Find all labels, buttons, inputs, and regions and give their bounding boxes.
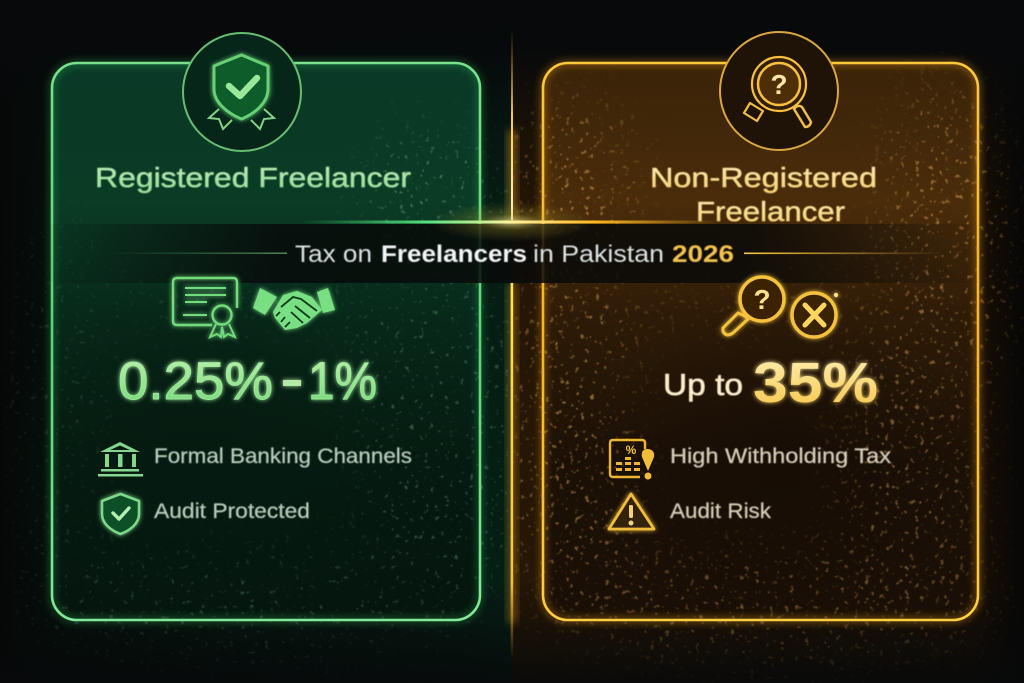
card border <box>52 63 480 620</box>
heading: registered freelancer: Registered Freelancer <box>95 162 411 193</box>
icon: tax calculator <box>610 440 654 480</box>
title text: 2026 <box>672 241 734 268</box>
big figure: 0.25% - 1%: 0.25% <box>118 352 273 411</box>
panel: registered freelancer <box>0 63 480 660</box>
icon: handshake <box>253 288 335 330</box>
card glow border <box>52 63 480 620</box>
title text: Tax on <box>295 241 372 268</box>
big figure: up to 35%: 35% <box>753 351 878 415</box>
title text: in Pakistan <box>533 241 664 268</box>
icon: magnifier with cross <box>723 277 838 337</box>
list row: formal banking channels <box>98 442 412 476</box>
label: Audit Protected <box>154 500 310 523</box>
label: Formal Banking Channels <box>154 445 412 468</box>
central vertical glowing divider <box>507 30 517 658</box>
icon: magnifier question badge: ? <box>770 69 788 100</box>
label: High Withholding Tax <box>670 445 892 468</box>
panel: non-registered freelancer <box>543 63 978 640</box>
label: Audit Risk <box>670 500 772 523</box>
banner background <box>40 224 985 283</box>
icon: shield badge <box>183 33 301 151</box>
card inner shade <box>0 280 400 660</box>
icon: warning triangle <box>609 494 654 529</box>
list row: audit protected <box>102 494 310 534</box>
speckle texture: amber <box>512 0 1024 683</box>
heading: non-registered freelancer: Freelancer <box>696 196 845 227</box>
heading: non-registered freelancer <box>650 162 877 227</box>
list row: audit risk <box>609 494 772 529</box>
icon: tax calculator: % <box>626 443 637 457</box>
banner top glowing line <box>300 220 720 224</box>
icon: bank <box>98 442 143 476</box>
title text: Freelancers <box>381 241 527 268</box>
title banner <box>40 202 985 283</box>
icon: certificate <box>173 278 237 337</box>
card border <box>543 63 978 620</box>
banner flare <box>432 202 592 242</box>
speckle texture: green <box>6 115 510 664</box>
icon: magnifier with cross: ? <box>753 284 771 315</box>
list row: high withholding tax <box>610 440 892 480</box>
background: green half <box>0 0 512 683</box>
big figure: 0.25% - 1%: 1% <box>308 352 377 411</box>
banner left rule <box>110 252 287 254</box>
icon: magnifier question badge <box>720 32 838 150</box>
big figure: 0.25% - 1% <box>118 352 377 411</box>
banner right rule <box>744 252 944 254</box>
big figure: up to 35%: Up to <box>663 367 743 402</box>
card fill <box>543 63 978 620</box>
big figure: up to 35% <box>663 351 878 415</box>
title text <box>295 241 734 268</box>
icon: small shield <box>102 494 139 534</box>
card inner shade <box>590 300 970 640</box>
heading: non-registered freelancer: Non-Registered <box>650 162 877 193</box>
card glow border <box>543 63 978 620</box>
card fill <box>52 63 480 620</box>
background: amber half <box>512 0 1024 683</box>
